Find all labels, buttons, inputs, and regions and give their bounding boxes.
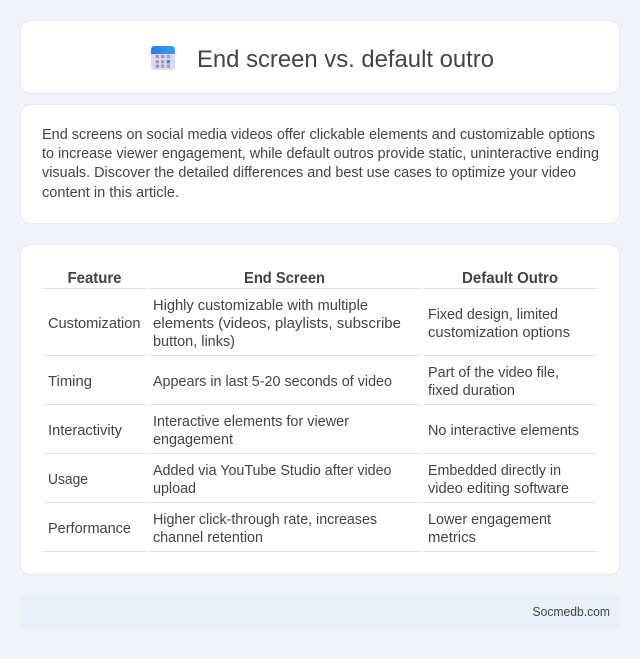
row: performance: metrics bbox=[428, 530, 476, 546]
row: usage: Added via YouTube Studio after video bbox=[153, 463, 392, 479]
row: customization: Customization bbox=[48, 316, 140, 332]
icon: calendar bbox=[151, 46, 175, 70]
intro paragraph: End screens on social media videos offer clickable elements and customizable options bbox=[42, 127, 595, 143]
row: usage: Embedded directly in bbox=[428, 463, 561, 479]
footer credit: Socmedb.com bbox=[532, 605, 610, 619]
row: usage: video editing software bbox=[428, 481, 569, 497]
panel: title card bbox=[20, 20, 620, 94]
panel: intro card bbox=[20, 104, 620, 224]
intro paragraph bbox=[42, 127, 599, 201]
intro paragraph: visuals. Discover the detailed differences and best use cases to optimize your video bbox=[42, 165, 576, 181]
table header: Default Outro bbox=[462, 270, 558, 287]
row: interactivity: Interactive elements for viewer bbox=[153, 414, 349, 430]
row: usage: Usage bbox=[48, 472, 88, 488]
panel: footer bar bbox=[20, 595, 620, 629]
row: timing: fixed duration bbox=[428, 383, 515, 399]
row: interactivity: engagement bbox=[153, 432, 233, 448]
intro paragraph: to increase viewer engagement, while default outros provide static, uninteractive ending bbox=[42, 146, 599, 162]
table header: End Screen bbox=[244, 270, 325, 287]
row: interactivity: No interactive elements bbox=[428, 423, 579, 439]
row: interactivity: Interactivity bbox=[48, 423, 123, 439]
row: timing: Part of the video file, bbox=[428, 365, 559, 381]
row: performance: Performance bbox=[48, 521, 131, 537]
row: usage bbox=[48, 463, 569, 497]
row: timing bbox=[48, 365, 559, 399]
panel: table card bbox=[20, 244, 620, 575]
intro paragraph: content in this article. bbox=[42, 185, 179, 201]
row: performance bbox=[48, 512, 551, 546]
row: performance: Higher click-through rate, increases bbox=[153, 512, 377, 528]
table header bbox=[68, 270, 558, 287]
row: customization bbox=[48, 298, 570, 350]
row: customization: customization options bbox=[428, 325, 570, 341]
row: performance: channel retention bbox=[153, 530, 263, 546]
row: customization: elements (videos, playlists, subscribe bbox=[153, 316, 401, 332]
row: interactivity bbox=[48, 414, 579, 448]
row: timing: Appears in last 5-20 seconds of video bbox=[153, 374, 392, 390]
row: customization: Fixed design, limited bbox=[428, 307, 558, 323]
row: usage: upload bbox=[153, 481, 196, 497]
table bbox=[43, 270, 597, 552]
row: performance: Lower engagement bbox=[428, 512, 551, 528]
table header: Feature bbox=[68, 270, 122, 287]
row: customization: Highly customizable with multiple bbox=[153, 298, 368, 314]
title: End screen vs. default outro bbox=[197, 46, 494, 73]
row: customization: button, links) bbox=[153, 334, 235, 350]
row: timing: Timing bbox=[48, 374, 92, 390]
